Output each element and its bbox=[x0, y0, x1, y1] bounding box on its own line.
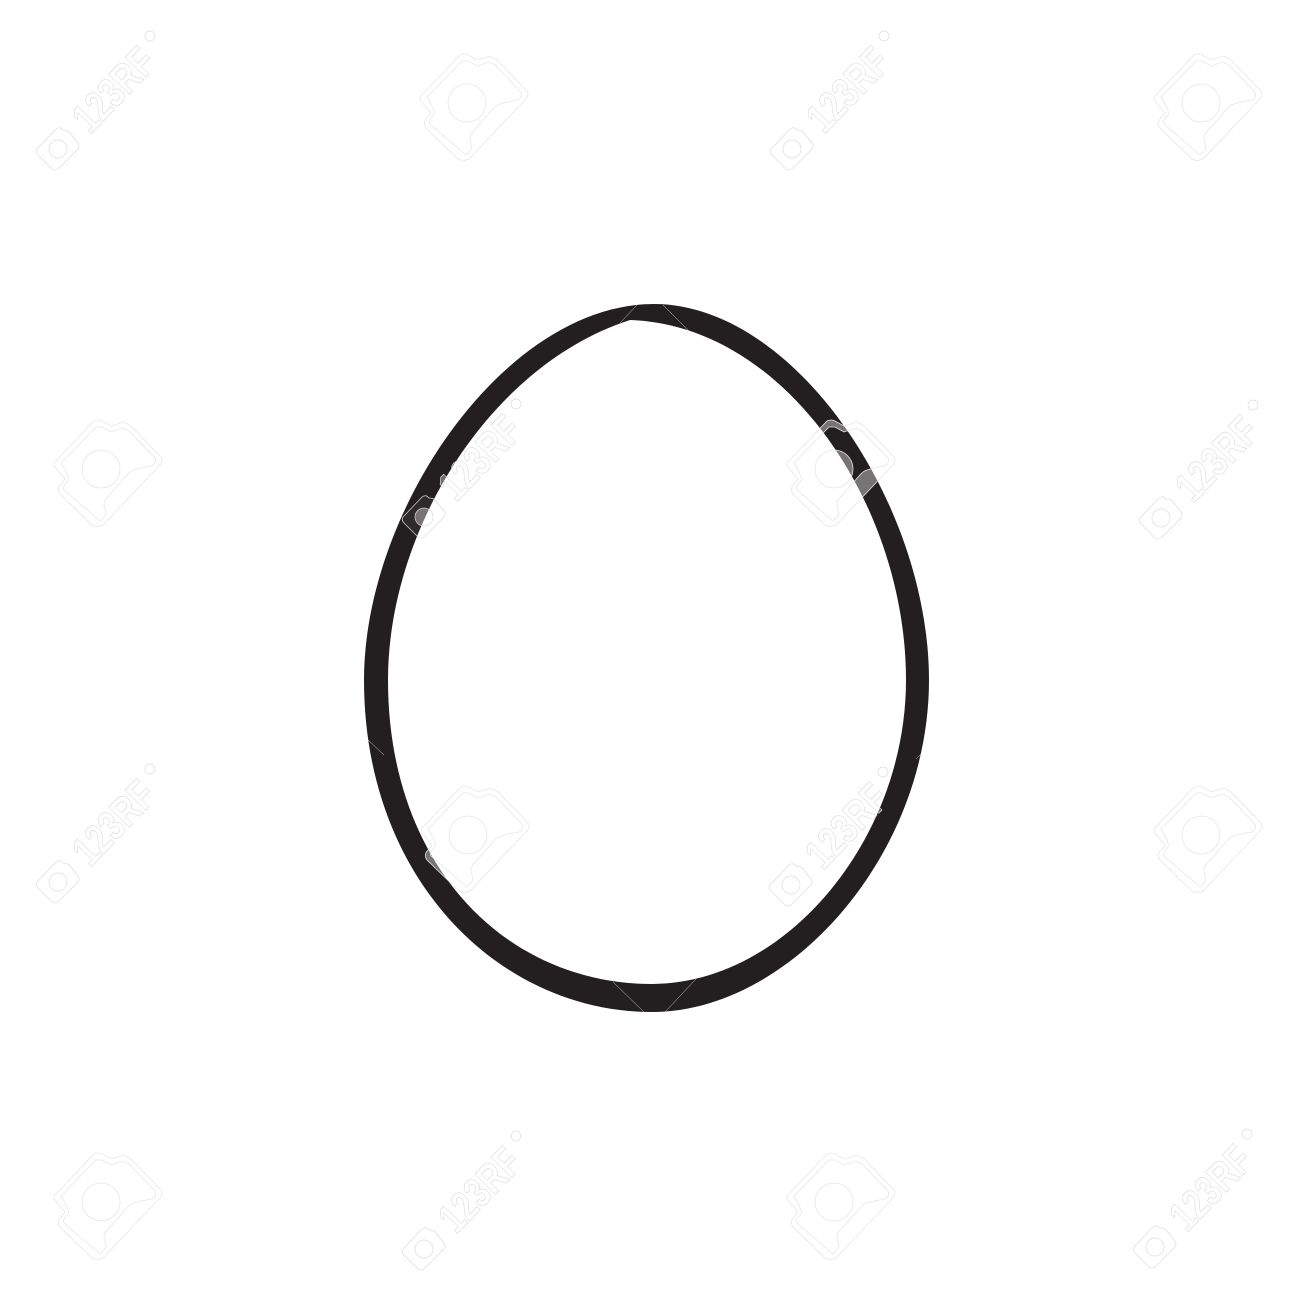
watermark logo: 123RF bbox=[429, 406, 531, 509]
watermark logo bbox=[769, 767, 898, 906]
watermark logo bbox=[402, 399, 531, 538]
watermark stamp bbox=[787, 1153, 895, 1260]
watermark logo: 123RF bbox=[1160, 1136, 1262, 1239]
watermark logo: 123RF bbox=[63, 771, 165, 874]
watermark logo bbox=[1133, 1129, 1262, 1268]
watermark logo: 123RF bbox=[796, 774, 898, 877]
watermark logo: 123RF bbox=[1166, 407, 1268, 510]
watermark stamp bbox=[420, 54, 528, 160]
watermark logo bbox=[402, 1131, 531, 1270]
watermark stamp bbox=[421, 786, 529, 892]
watermark stamp bbox=[54, 420, 162, 526]
watermark stamp bbox=[54, 1153, 162, 1260]
icon: egg outline bbox=[364, 304, 929, 1012]
watermark logo bbox=[770, 31, 899, 170]
watermark logo: 123RF bbox=[63, 38, 165, 141]
watermark logo: 123RF bbox=[797, 38, 899, 141]
watermark logo: 123RF bbox=[429, 1138, 531, 1241]
watermark stamp bbox=[1154, 54, 1262, 160]
watermark logo bbox=[36, 764, 165, 903]
watermark stamp bbox=[787, 420, 895, 526]
watermark logo bbox=[36, 31, 165, 170]
watermark logo bbox=[1139, 400, 1268, 539]
watermark stamp bbox=[1154, 786, 1262, 892]
